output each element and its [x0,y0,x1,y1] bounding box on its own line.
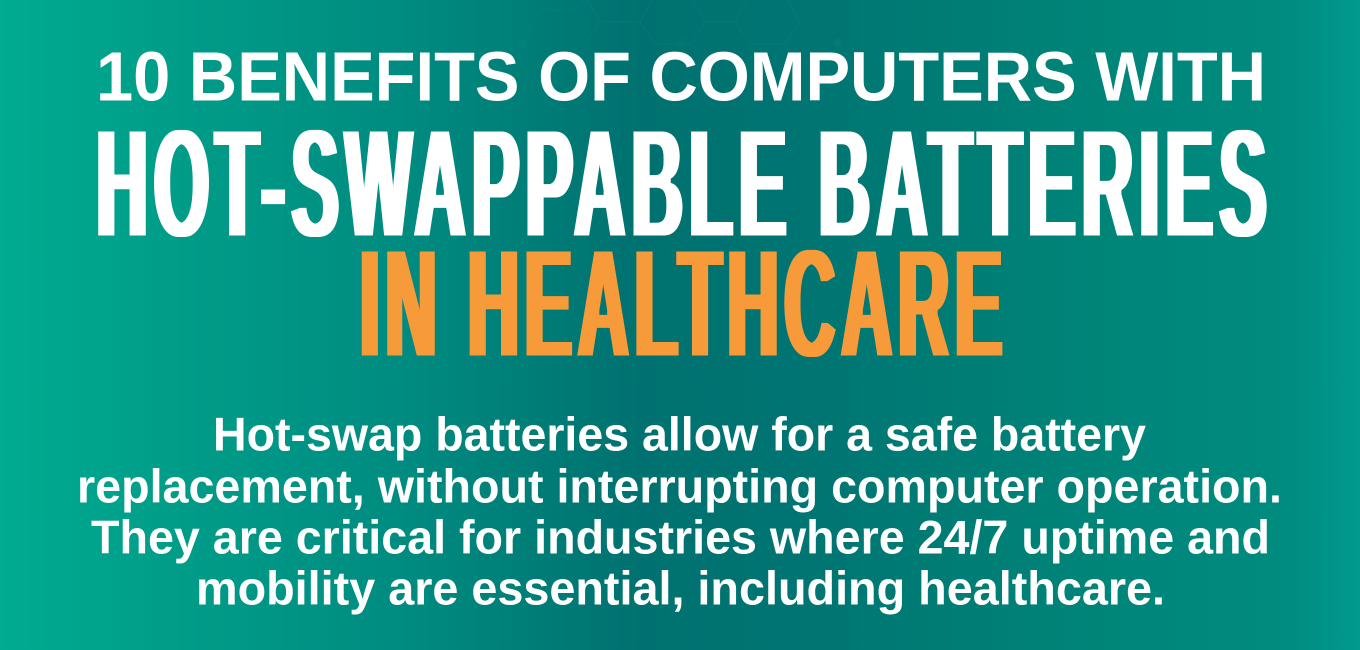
title line 2: HOT-SWAPPABLE BATTERIES [96,96,1267,271]
title line 3: IN HEALTHCARE [360,216,1002,391]
intro paragraph [77,408,1282,616]
intro line 1: Hot-swap batteries allow for a safe battery [213,408,1147,462]
title line 1: 10 BENEFITS OF COMPUTERS WITH [96,38,1266,116]
title [96,38,1267,391]
decorative hexagon pattern [519,0,842,48]
intro line 4: mobility are essential, including healthcare. [196,562,1165,616]
intro line 2: replacement, without interrupting computer operation. [77,460,1282,514]
intro line 3: They are critical for industries where 24/7 uptime and [91,512,1270,564]
